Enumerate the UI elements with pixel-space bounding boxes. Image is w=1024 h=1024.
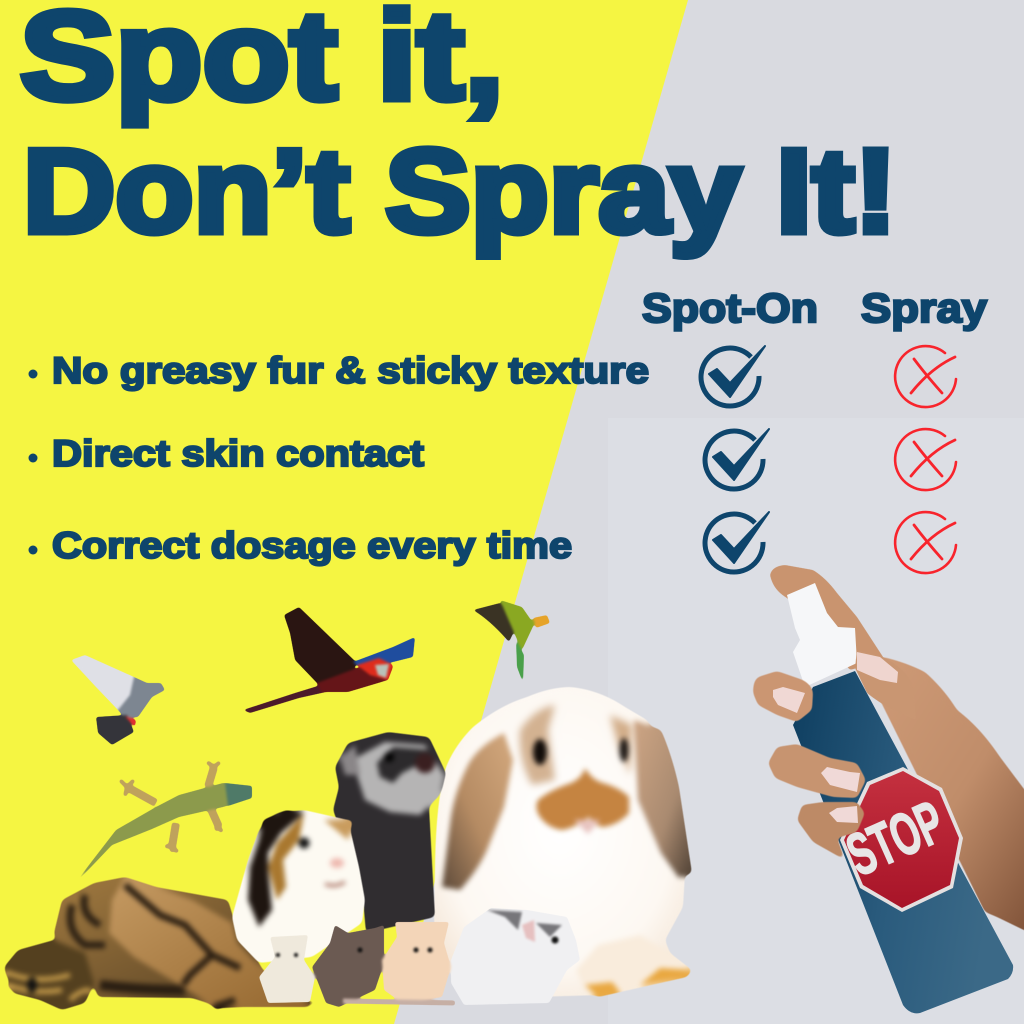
rabbit foot — [576, 935, 692, 997]
rabbit left ear — [442, 733, 513, 890]
index finger — [770, 565, 885, 670]
back coil — [54, 877, 326, 1008]
rabbit nose patch — [536, 768, 629, 830]
icon: cross row 1 — [895, 346, 956, 407]
bottle nozzle and cap — [787, 583, 857, 687]
stop sign — [837, 767, 963, 912]
illustration: ferret — [333, 732, 446, 933]
rabbit nose — [574, 820, 600, 834]
illustration: green parakeet — [473, 600, 550, 683]
finger 1 — [753, 671, 813, 722]
icon: check row 2 — [705, 429, 769, 489]
thumb nail — [857, 652, 898, 683]
finger 2 — [768, 744, 866, 798]
illustration: snake — [4, 877, 326, 1010]
thumb — [855, 650, 916, 720]
rabbit eyes — [533, 739, 547, 765]
bottle body — [793, 671, 1013, 1013]
illustration: macaw — [243, 607, 415, 713]
illustration: guinea pig — [232, 810, 365, 963]
benefit: no greasy fur: No greasy fur & sticky texture — [52, 350, 649, 391]
title: Don’t Spray It! — [23, 125, 897, 258]
stop sign: STOP — [837, 788, 954, 889]
gerbil — [259, 935, 315, 1003]
finger 3 — [797, 802, 865, 860]
background: grey diagonal panel — [394, 0, 1024, 1024]
illustration: small rodents — [259, 908, 580, 1007]
background: lighter photo panel — [608, 418, 1024, 1024]
hamster — [382, 922, 451, 1003]
rabbit body and head — [434, 687, 685, 998]
rat tail — [343, 1001, 455, 1003]
finger 1 nail — [773, 687, 805, 713]
benefit: direct skin contact: Direct skin contact — [52, 433, 424, 474]
illustration: hand holding spray bottle — [753, 565, 1024, 1013]
front coil — [109, 877, 312, 1007]
column heading: Spot-On: Spot-On — [642, 285, 818, 331]
rabbit right ear — [634, 720, 692, 878]
illustration: pigeon — [71, 655, 165, 745]
icon: check row 1 — [701, 346, 765, 406]
icon: cross row 2 — [895, 429, 956, 490]
icon: cross row 3 — [895, 512, 956, 573]
rabbit shading patches — [520, 705, 555, 785]
illustration: gecko — [72, 762, 252, 887]
illustration: rabbit — [434, 687, 692, 998]
snake head — [4, 940, 94, 1010]
column heading: Spray: Spray — [861, 285, 987, 331]
brown mouse — [312, 925, 384, 1007]
benefit: correct dosage: Correct dosage every time — [52, 525, 572, 566]
back of hand — [855, 657, 1024, 933]
icon: check row 3 — [705, 512, 769, 572]
white rat — [451, 908, 580, 1005]
finger 2 nail — [821, 767, 860, 792]
title — [20, 0, 897, 258]
finger 3 nail — [829, 806, 858, 823]
